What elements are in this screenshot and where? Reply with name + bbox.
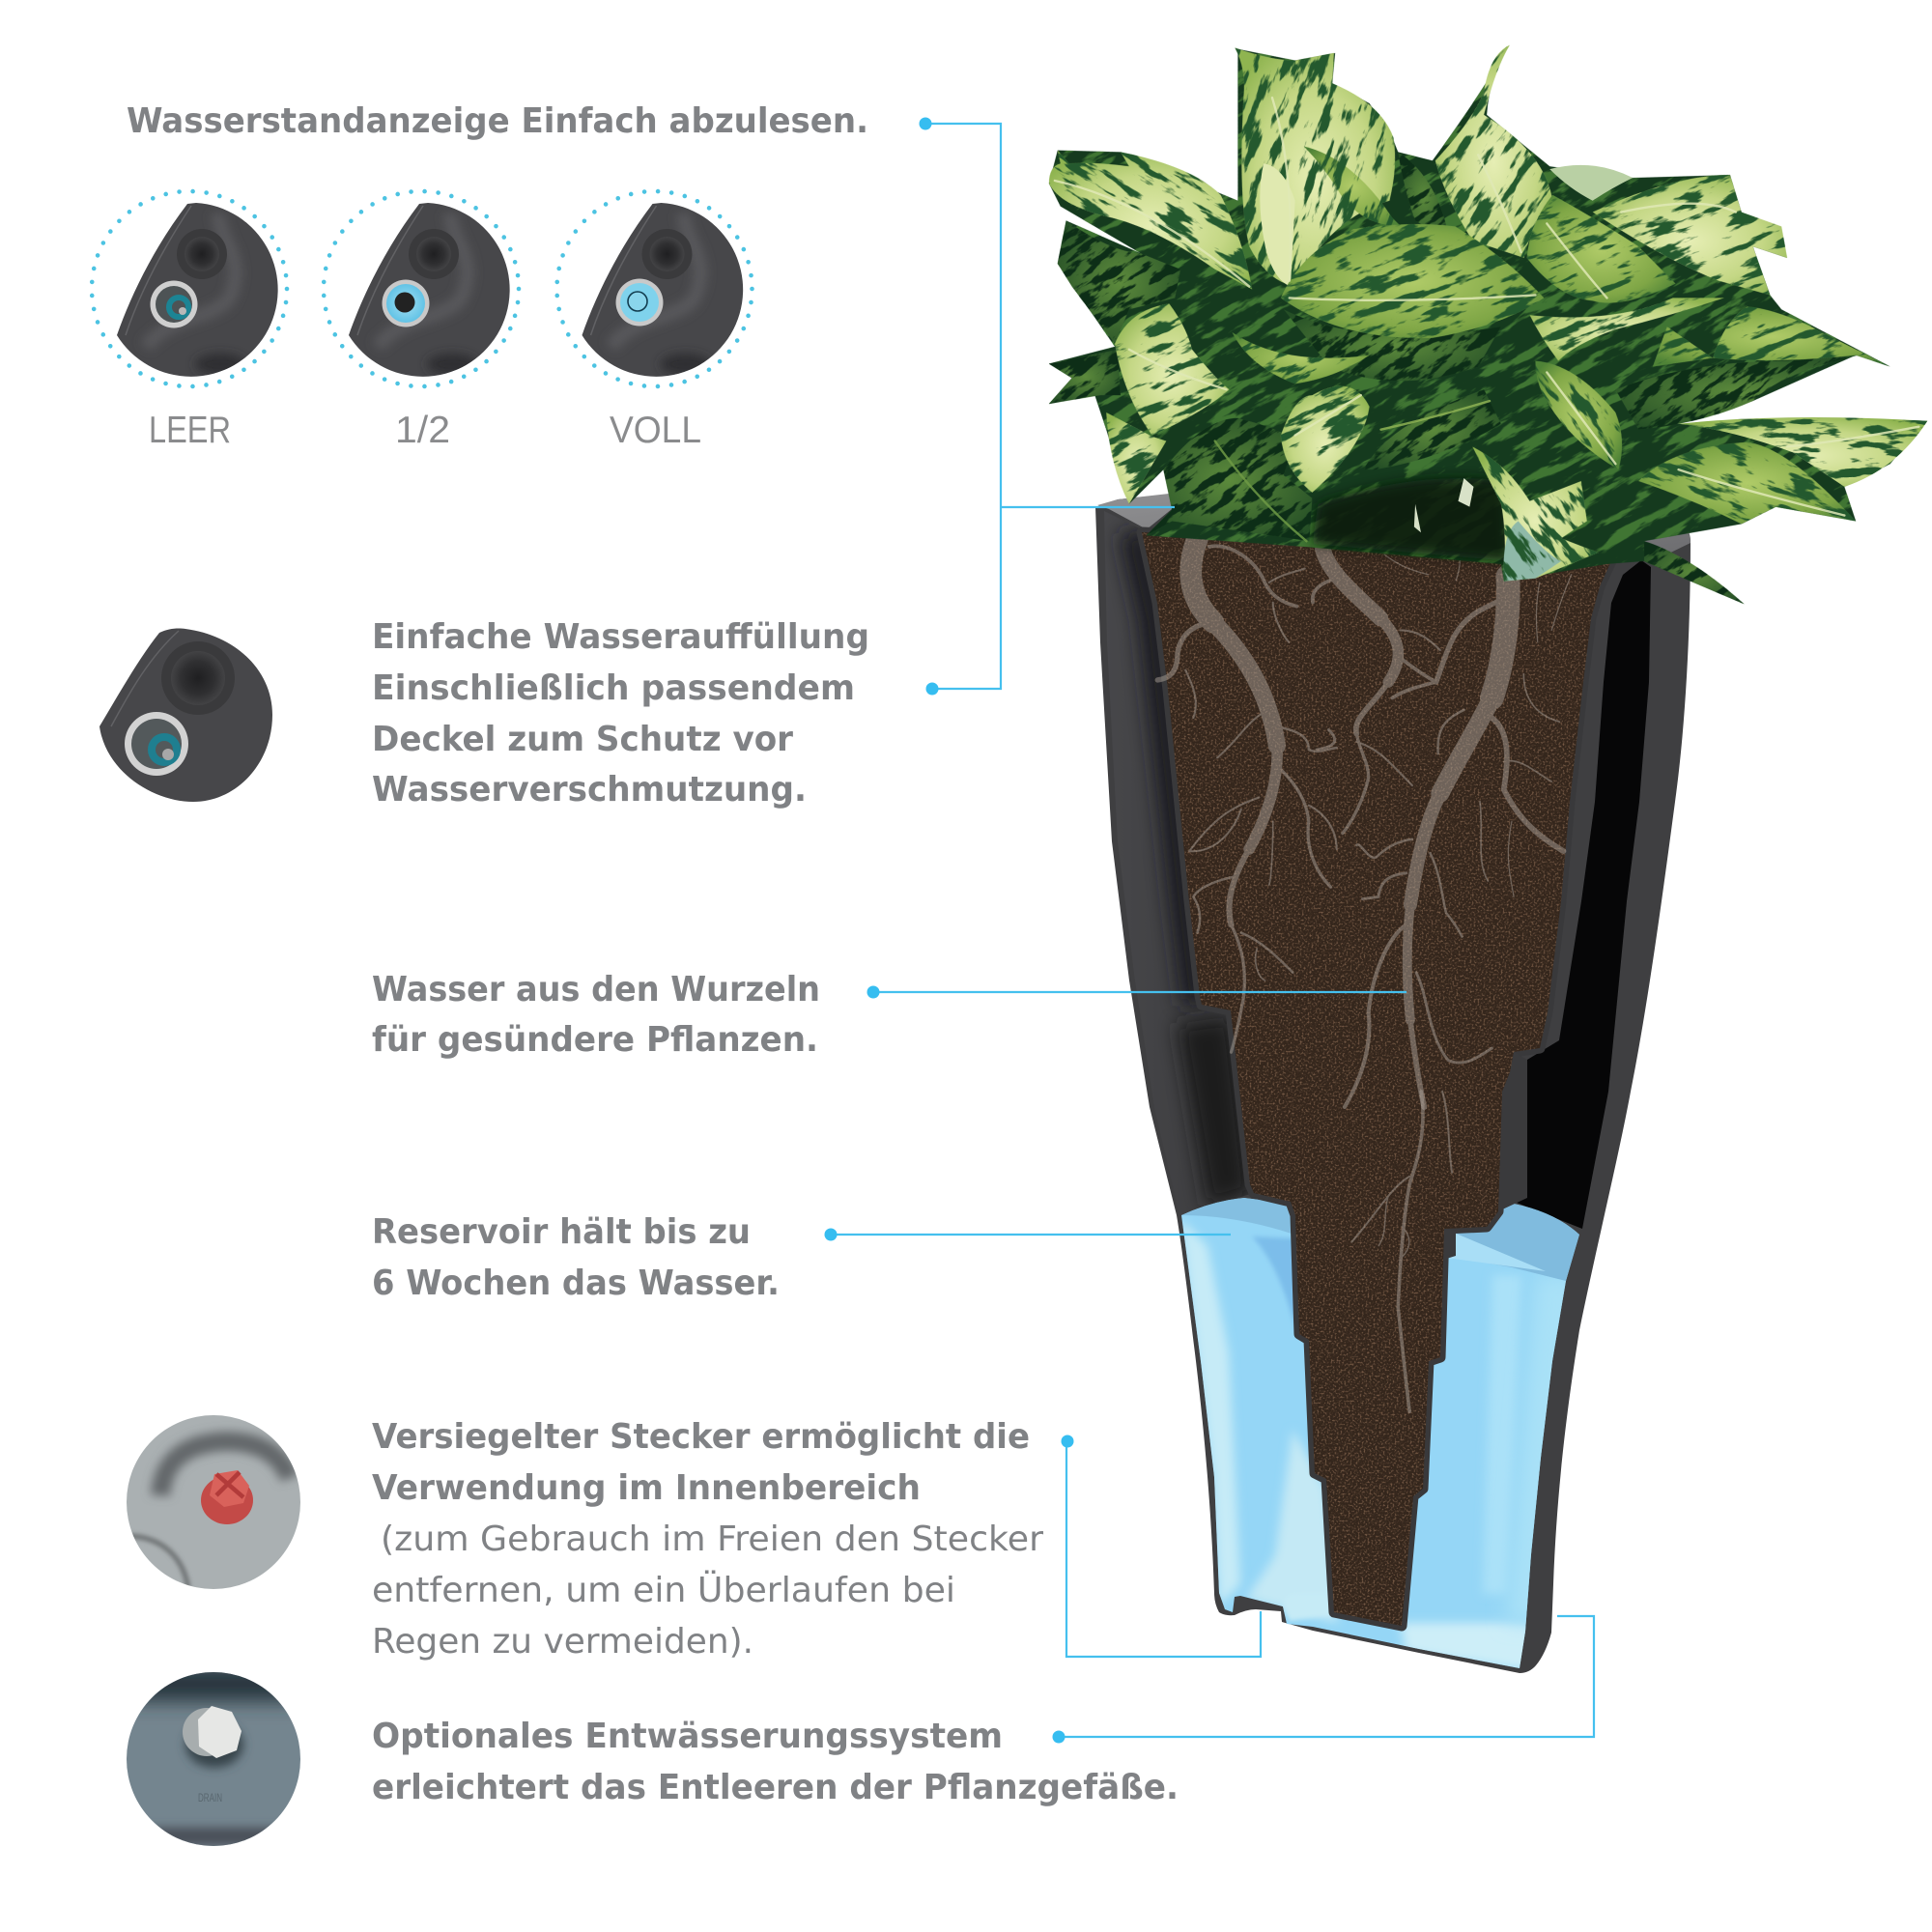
water bubbles <box>1283 1605 1323 1623</box>
text: reservoir: 6 Wochen das Wasser. <box>372 1264 780 1303</box>
foam right <box>1446 1204 1579 1281</box>
text: roots: für gesündere Pflanzen. <box>372 1020 818 1060</box>
callout: drain <box>1053 1616 1594 1743</box>
text: plug: Regen zu vermeiden). <box>372 1622 753 1662</box>
leaf midribs <box>1055 98 1918 541</box>
text: roots: Wasser aus den Wurzeln <box>372 970 820 1009</box>
gauge: full <box>556 191 752 386</box>
title: Wasserstandanzeige Einfach abzulesen. <box>127 101 868 141</box>
right-hand leaves <box>1219 0 1932 562</box>
text: reservoir: Reservoir hält bis zu <box>372 1212 751 1252</box>
water bottom highlight <box>1246 1430 1338 1623</box>
liner step right <box>1443 1052 1527 1260</box>
deep shadow at soil line <box>1312 478 1510 561</box>
pot outer shell <box>1095 494 1690 1673</box>
far right leaf <box>1679 417 1927 487</box>
planter cross-section <box>1095 494 1690 1681</box>
plant foliage <box>807 0 1932 984</box>
icon: red plug photo <box>127 1415 300 1589</box>
water gauge states <box>92 191 752 451</box>
gauge labels: 1/2 <box>395 410 450 451</box>
text: drainage: erleichtert das Entleeren der Pflanzgefäße. <box>372 1768 1179 1807</box>
text: drainage: Optionales Entwässerungssystem <box>372 1717 1003 1756</box>
water right strips <box>1483 1275 1521 1594</box>
left chamber shading <box>1135 531 1252 1208</box>
gauge: half <box>324 191 519 386</box>
left lower leaves <box>1030 203 1446 605</box>
roots lower <box>1351 1092 1452 1411</box>
callout: plug <box>1061 1435 1261 1657</box>
text: plug: (zum Gebrauch im Freien den Stecker <box>381 1520 1043 1559</box>
text: refill <box>372 617 869 810</box>
text: refill: Deckel zum Schutz vor <box>372 720 793 759</box>
gauge labels: LEER <box>149 410 231 451</box>
right chamber <box>1517 560 1651 1229</box>
callout: gauge and refill <box>920 118 1175 696</box>
text: roots <box>372 970 820 1060</box>
water left highlight <box>1180 1219 1240 1605</box>
lower right leaf <box>1612 372 1882 594</box>
callout: reservoir <box>825 1229 1231 1240</box>
text: drainage <box>372 1717 1179 1807</box>
text: refill: Einfache Wasserauffüllung <box>372 617 869 657</box>
text: refill: Wasserverschmutzung. <box>372 770 807 810</box>
liner band <box>1142 532 1615 1626</box>
text: plug: Verwendung im Innenbereich <box>372 1468 921 1508</box>
text: plug: Versiegelter Stecker ermöglicht die <box>372 1417 1030 1457</box>
bottom centre-right leaves <box>1369 291 1725 651</box>
text: plug: entfernen, um ein Überlaufen bei <box>372 1570 955 1610</box>
callout: roots <box>867 985 1406 999</box>
soil <box>1142 532 1615 1626</box>
leaf silhouette base <box>807 0 1932 983</box>
icon: refill cap <box>99 628 272 802</box>
water reservoir <box>1181 1198 1579 1668</box>
gauge labels: VOLL <box>610 410 701 451</box>
roots upper <box>1157 539 1572 1107</box>
text: drain label: DRAIN <box>198 1791 222 1804</box>
top leaves <box>1158 0 1478 340</box>
text: reservoir <box>372 1212 780 1303</box>
pale stem <box>1260 163 1295 287</box>
foam left <box>1181 1198 1294 1235</box>
gauge labels <box>149 410 701 451</box>
rim top <box>1097 494 1690 562</box>
left chamber <box>1104 511 1254 1215</box>
gauge: empty <box>92 191 287 386</box>
icon: drain bolt photo <box>127 1666 300 1846</box>
callout lines <box>825 118 1594 1743</box>
back leaves <box>837 0 1932 984</box>
stem slivers <box>1414 478 1473 532</box>
back pale leaf <box>1549 165 1633 201</box>
text: refill: Einschließlich passendem <box>372 668 855 708</box>
text: plug <box>372 1417 1043 1662</box>
left big leaf <box>989 63 1313 378</box>
